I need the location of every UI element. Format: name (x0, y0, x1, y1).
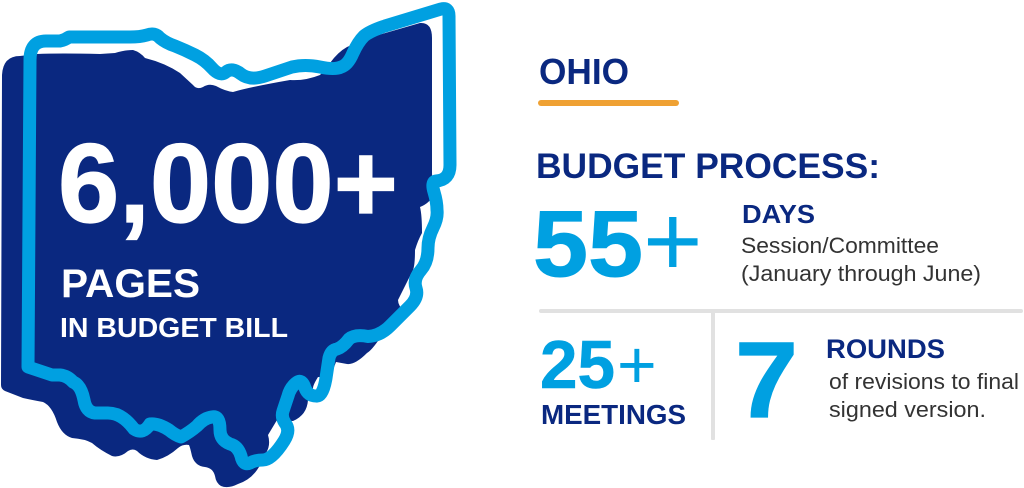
number: 25+: 25 (540, 327, 615, 403)
label: DAYS: DAYS (742, 199, 815, 229)
description: revisions: of revisions to final (829, 369, 1019, 394)
label: IN BUDGET BILL: IN BUDGET BILL (60, 312, 288, 343)
description: revisions (829, 369, 1019, 422)
label: ROUNDS: ROUNDS (826, 334, 945, 364)
number: 55+: + (643, 184, 703, 298)
heading: BUDGET PROCESS: BUDGET PROCESS: (536, 147, 880, 186)
description: revisions: signed version. (829, 397, 986, 422)
heading: OHIO: OHIO (539, 51, 629, 92)
map: light blue Ohio outline (28, 9, 450, 464)
description: session and committee: (January through June) (741, 261, 981, 286)
number: 55+: 55 (533, 191, 643, 296)
number: 7: 7 (735, 319, 798, 440)
stat: 25+ meetings (540, 327, 686, 430)
label: MEETINGS: MEETINGS (541, 399, 686, 430)
stat: 6,000+: 6,000+ (58, 121, 398, 246)
divider lines (539, 309, 1023, 440)
description: session and committee: Session/Committee (741, 233, 939, 258)
panel: Ohio map (1, 9, 450, 487)
stat: 55+ days (533, 184, 981, 298)
label: PAGES: PAGES (61, 262, 200, 306)
orange heading underline (538, 100, 679, 106)
description: session and committee (741, 233, 981, 286)
number: 25+: + (617, 327, 657, 403)
stat: 7 rounds (735, 319, 1019, 440)
map: navy Ohio state shape (1, 23, 433, 487)
